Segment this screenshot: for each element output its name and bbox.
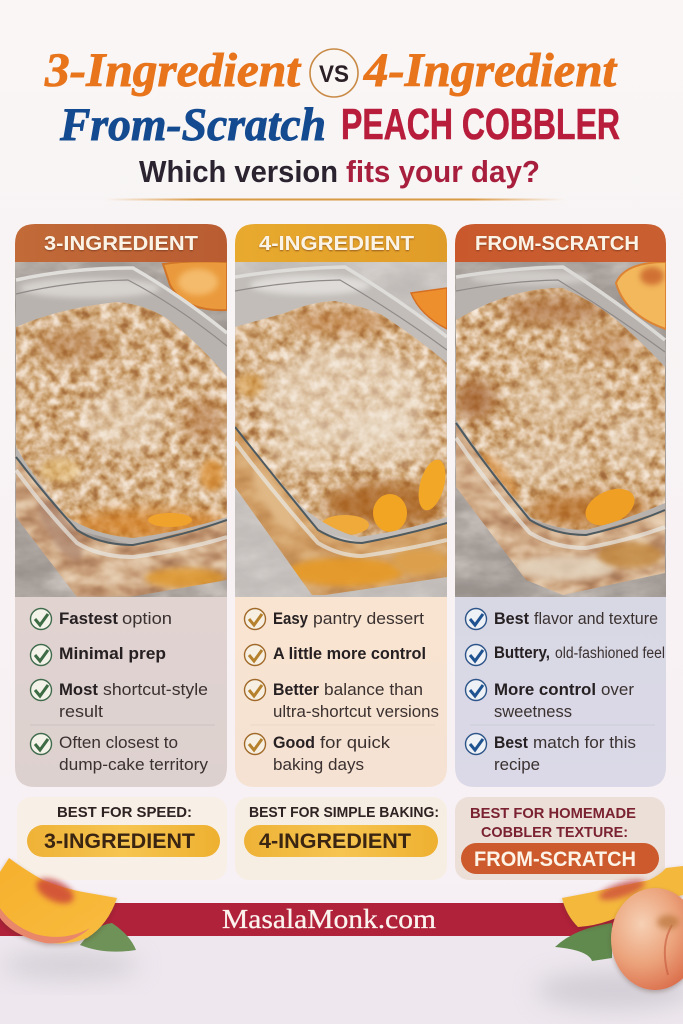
- subtitle: fits your day?: [346, 154, 540, 189]
- item: best match for this recipe: Best: [494, 733, 528, 752]
- check icon: [30, 608, 52, 630]
- photo: 4-ingredient cobbler: [235, 262, 450, 597]
- panel: 3-ingredient: [15, 224, 230, 880]
- list: 4-ingredient features: [235, 597, 447, 787]
- item: better balance: balance than: [324, 680, 423, 699]
- item: fastest option: [59, 609, 172, 628]
- footer banner: [0, 903, 683, 936]
- item: best flavor and texture: Best: [494, 609, 529, 628]
- check icon: [30, 680, 52, 700]
- panel: 4-ingredient: [235, 224, 450, 880]
- item: easy pantry dessert: Easy: [273, 609, 308, 628]
- title block: [44, 44, 620, 189]
- panel: from-scratch: [455, 224, 666, 880]
- item: more control over sweetness: over: [601, 680, 634, 699]
- item: more control over sweetness: More control: [494, 680, 596, 699]
- verdict: best for speed: BEST FOR SPEED:: [57, 804, 192, 821]
- title: From-Scratch: From-Scratch: [59, 99, 326, 151]
- title: 4-Ingredient: 4-Ingredient: [363, 44, 618, 97]
- item: best flavor and texture: flavor and texture: [534, 609, 658, 628]
- item: most shortcut-style result: result: [59, 702, 103, 721]
- header: 3-ingredient: [15, 224, 227, 262]
- footer banner: MasalaMonk.com: [222, 904, 436, 934]
- icon: mint leaf right: [555, 923, 612, 961]
- header: from-scratch: [455, 224, 666, 262]
- icon: peach slice left: [0, 858, 117, 943]
- header: from-scratch: FROM-SCRATCH: [475, 232, 639, 255]
- item: easy pantry dessert: pantry dessert: [313, 609, 424, 628]
- header: 4-ingredient: [235, 224, 447, 262]
- list: from-scratch features: [455, 597, 666, 787]
- item: buttery old-fashioned feel: old-fashioned feel: [555, 645, 665, 662]
- subtitle: [139, 154, 540, 189]
- item: better balance: ultra-shortcut versions: [273, 702, 439, 721]
- item: a little more control: A little more control: [273, 644, 426, 663]
- marble table surface: [0, 936, 683, 1024]
- verdict: best for simple baking: BEST FOR SIMPLE BAKING:: [249, 804, 439, 821]
- header: 4-ingredient: 4-INGREDIENT: [259, 232, 415, 255]
- item: better balance: [273, 680, 439, 721]
- check icon: [466, 644, 486, 666]
- check icon: [244, 680, 266, 700]
- vs badge: [310, 49, 358, 97]
- header: 3-ingredient: 3-INGREDIENT: [44, 232, 199, 255]
- item: more control over sweetness: [494, 680, 634, 721]
- item: best match for this recipe: match for this: [533, 733, 636, 752]
- item: fastest option: option: [122, 609, 172, 628]
- verdict: best for homemade cobbler texture: [455, 797, 665, 880]
- title: 3-Ingredient: 3-Ingredient: [44, 44, 302, 97]
- item: most shortcut-style result: Most: [59, 680, 98, 699]
- check icon: [30, 644, 52, 666]
- verdict: best for homemade cobbler texture: BEST FOR HOMEMADE: [470, 805, 636, 822]
- item: best match for this recipe: [494, 733, 636, 774]
- item: good for quick baking days: Good: [273, 733, 315, 752]
- check icon: [244, 608, 266, 630]
- item: fastest option: Fastest: [59, 609, 118, 628]
- item: often closest to dump-cake territory: dump-cake territory: [59, 755, 209, 774]
- item: often closest to dump-cake territory: Often closest to: [59, 733, 178, 752]
- check icon: [466, 734, 486, 754]
- check icon: [244, 734, 266, 754]
- photo: 3-ingredient cobbler: [15, 261, 230, 597]
- verdict: best for homemade cobbler texture: COBBLER TEXTURE:: [481, 824, 628, 841]
- verdict: best for homemade cobbler texture: FROM-SCRATCH: [474, 848, 636, 871]
- icon: whole peach: [611, 888, 683, 990]
- vs badge: VS: [319, 61, 349, 88]
- icon: peach slice right: [562, 866, 683, 927]
- item: minimal prep: Minimal prep: [59, 644, 166, 663]
- list: 3-ingredient features: [15, 597, 227, 787]
- item: more control over sweetness: sweetness: [494, 702, 572, 721]
- verdict: best for speed: 3-INGREDIENT: [44, 830, 195, 853]
- verdict: best for simple baking: 4-INGREDIENT: [259, 830, 411, 853]
- item: often closest to dump-cake territory: [59, 733, 209, 774]
- check icon: [466, 680, 486, 700]
- item: most shortcut-style result: shortcut-style: [103, 680, 208, 699]
- item: good for quick baking days: for quick: [320, 733, 391, 752]
- item: most shortcut-style result: [59, 680, 208, 721]
- item: best match for this recipe: recipe: [494, 755, 540, 774]
- icon: mint leaf left: [80, 923, 136, 952]
- check icon: [244, 644, 266, 666]
- photo: from-scratch cobbler: [455, 262, 666, 597]
- subtitle: Which version: [139, 154, 338, 189]
- item: good for quick baking days: [273, 733, 391, 774]
- verdict: best for simple baking: [235, 797, 447, 880]
- check icon: [30, 734, 52, 754]
- item: good for quick baking days: baking days: [273, 755, 364, 774]
- check icon: [466, 608, 486, 630]
- item: better balance: Better: [273, 680, 319, 699]
- item: buttery old-fashioned feel: [494, 643, 665, 662]
- verdict: best for speed: [17, 797, 227, 880]
- item: buttery old-fashioned feel: Buttery,: [494, 643, 550, 662]
